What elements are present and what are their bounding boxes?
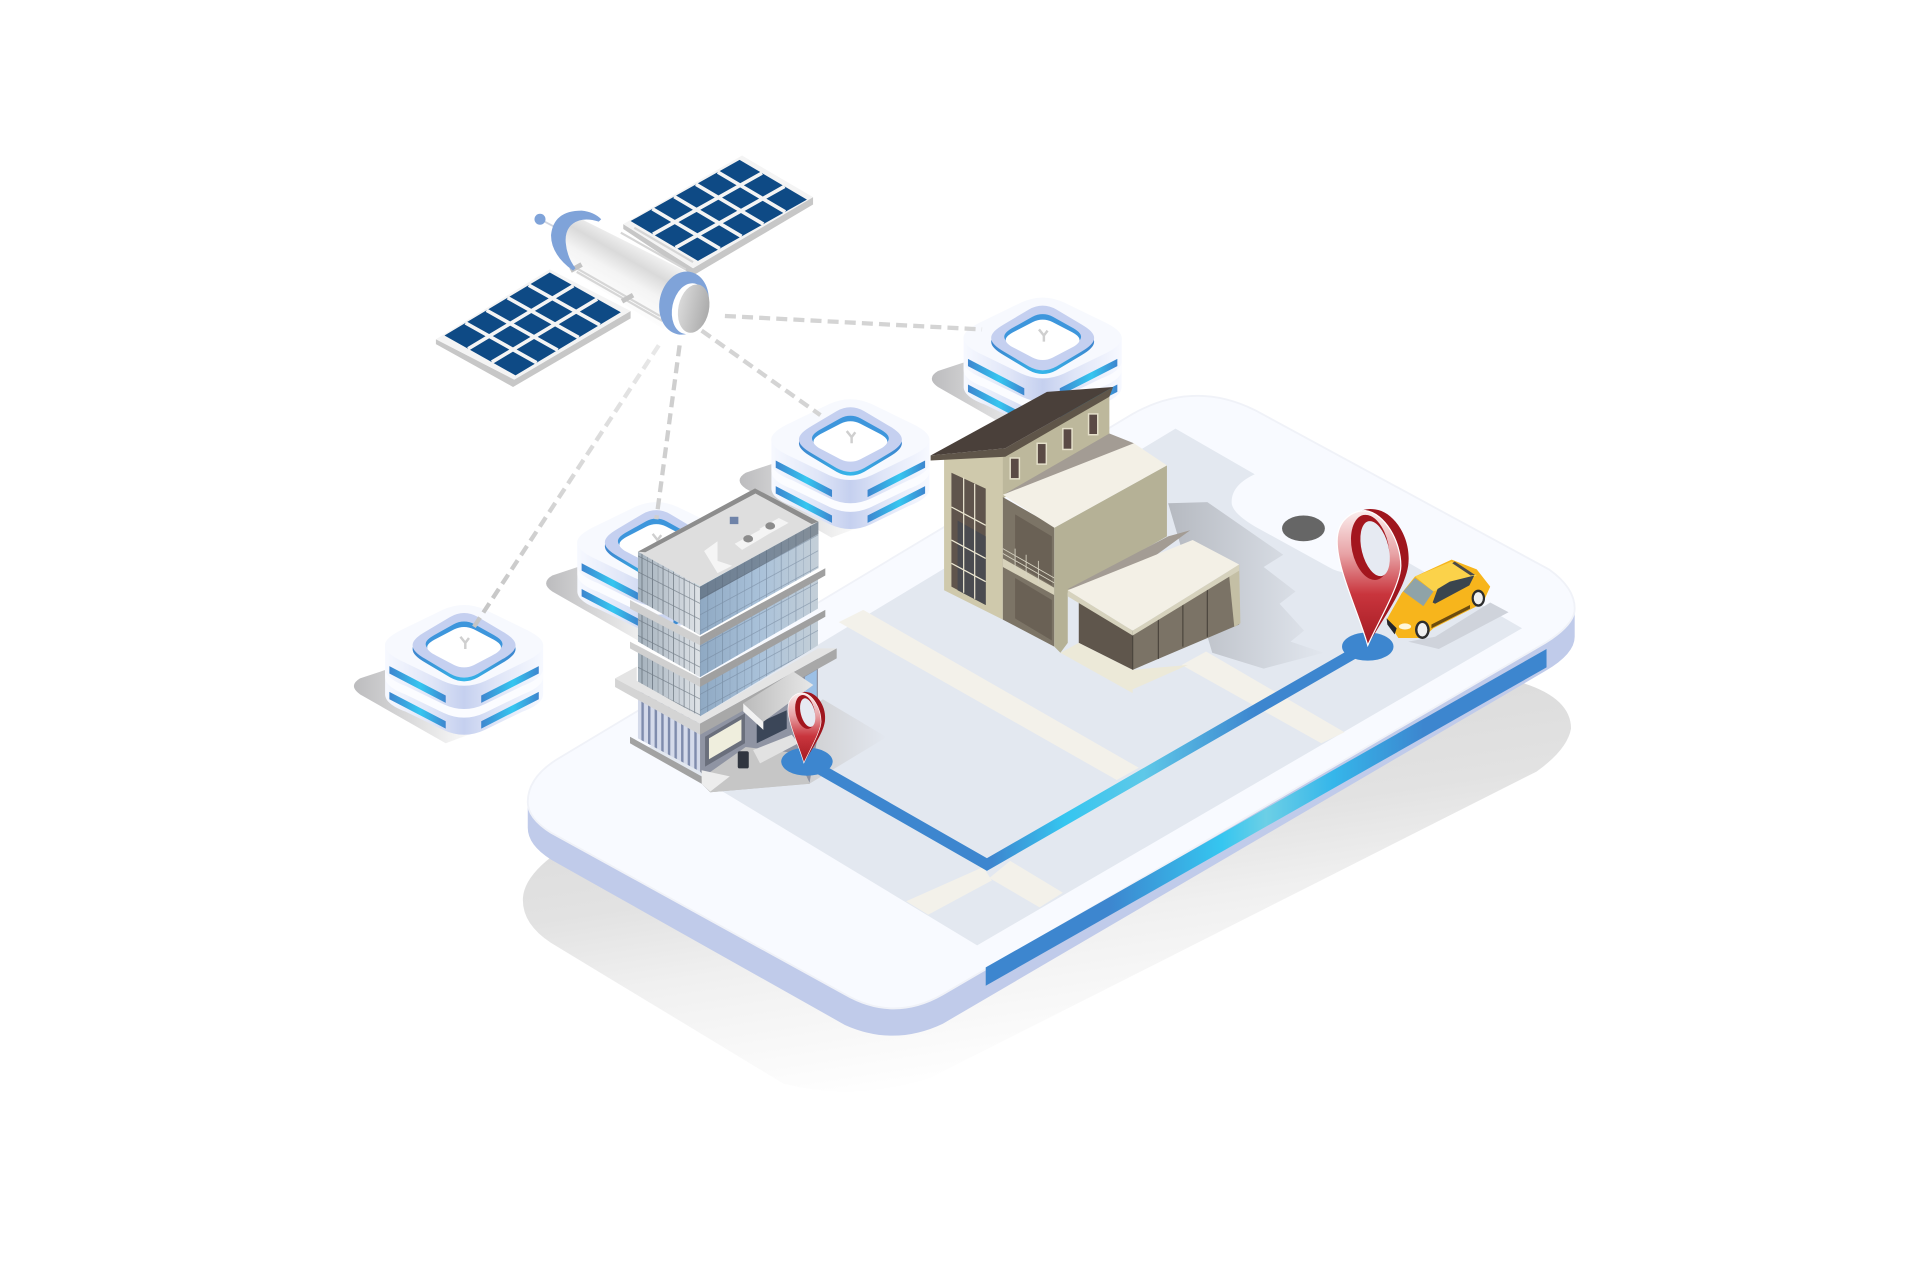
headlight: [1399, 623, 1411, 630]
balcony recess: [1003, 497, 1054, 647]
route line: [807, 645, 1368, 865]
wing terrace roof: [1068, 530, 1190, 589]
phone side wall: [528, 609, 1575, 1036]
signal node 2 shadow: [740, 460, 874, 538]
upper glass dark band: [700, 522, 818, 600]
slab two: [630, 610, 825, 687]
signal node 1: [385, 605, 543, 735]
front ring: [653, 267, 715, 339]
main block roof: [1003, 443, 1167, 528]
wing glazing right: [1133, 572, 1239, 670]
signal node 4 shadow: [932, 359, 1067, 436]
signal node 4: [964, 298, 1122, 427]
rear ring: [551, 211, 601, 271]
tower front wall: [944, 456, 1003, 620]
ground floor left stripes: [638, 686, 700, 771]
top floor left mullions: [638, 552, 700, 635]
floor two left glass: [638, 607, 700, 677]
floor three left mullions: [638, 648, 700, 716]
attic windows: [1010, 414, 1098, 479]
wing roof: [1068, 540, 1239, 636]
house ground shadow: [1168, 502, 1324, 669]
slab one: [630, 568, 825, 645]
spoiler: [1452, 561, 1475, 576]
right solar panel: [623, 156, 813, 276]
office building: [615, 488, 837, 792]
antenna: [534, 214, 561, 230]
tall window: [951, 473, 986, 605]
terrace roof: [1005, 434, 1134, 495]
signal link to node 1: [471, 345, 659, 631]
signal link to node 4: [725, 316, 982, 329]
roof: [638, 488, 818, 587]
awning: [743, 672, 813, 730]
signal link to node 3: [656, 345, 680, 519]
dark entrance windows: [757, 710, 787, 743]
phone top surface: [528, 396, 1575, 1008]
floor two left mullions: [638, 607, 700, 677]
satellite body: [565, 218, 692, 329]
side windows: [1433, 576, 1474, 604]
phone light strip: [986, 649, 1547, 986]
top floor right mullions: [700, 522, 818, 635]
windshield: [1403, 578, 1433, 606]
side stairs: [702, 770, 730, 792]
shop window: [705, 713, 745, 767]
roof: [931, 387, 1113, 460]
top floor right glass: [700, 522, 818, 635]
upper wall: [1000, 396, 1109, 500]
blue side window: [805, 670, 817, 704]
route start marker disc: [781, 748, 833, 776]
base platform: [1060, 643, 1188, 693]
phone device: [528, 396, 1575, 1036]
entrance steps: [753, 735, 798, 763]
front wheel: [1415, 621, 1430, 639]
entrance slab three: [615, 648, 837, 735]
route end marker disc: [1342, 632, 1393, 661]
floor two right glass: [700, 576, 818, 677]
car shadow: [1408, 602, 1509, 649]
main block right wall: [1054, 465, 1167, 653]
car roof: [1415, 561, 1477, 591]
wing glazing left: [1079, 600, 1133, 670]
front cap: [674, 281, 714, 336]
grille: [1387, 618, 1397, 634]
wing mullions: [1133, 588, 1207, 670]
signal link to node 2: [702, 331, 820, 415]
sill: [1431, 605, 1470, 628]
red pin start: [788, 692, 825, 763]
camera dot: [1282, 516, 1325, 541]
rod clamps: [571, 265, 633, 301]
rear wheel: [1472, 590, 1485, 607]
floor three right mullions: [700, 616, 818, 716]
map screen: [649, 429, 1522, 945]
road D: [906, 867, 992, 915]
signal node 1 shadow: [354, 666, 489, 743]
map base: [649, 429, 1522, 945]
building ground shadow: [699, 699, 887, 792]
floor three left glass: [638, 648, 700, 716]
road B: [1182, 651, 1344, 743]
support rods: [574, 228, 693, 321]
signal node 3: [577, 502, 735, 632]
signal node 3 shadow: [546, 563, 681, 640]
road A: [839, 610, 1139, 780]
satellite: [436, 156, 813, 387]
phone ground shadow: [523, 677, 1571, 1092]
red pin end: [1337, 509, 1409, 645]
top floor left glass: [638, 552, 700, 635]
wing end post: [1228, 565, 1240, 627]
base plinth: [630, 737, 702, 784]
left solar panel: [436, 269, 631, 387]
front ring inner: [667, 280, 712, 337]
screen notch: [1232, 471, 1403, 572]
floor three right glass: [700, 616, 818, 716]
lobby floor: [704, 747, 810, 792]
trash bin: [738, 751, 749, 768]
taxi car: [1387, 560, 1490, 639]
house: [931, 387, 1240, 693]
floor two right mullions: [700, 576, 818, 677]
ground floor right wall: [700, 654, 818, 784]
car body: [1387, 560, 1490, 638]
signal node 2: [771, 399, 930, 529]
road C: [989, 861, 1063, 907]
